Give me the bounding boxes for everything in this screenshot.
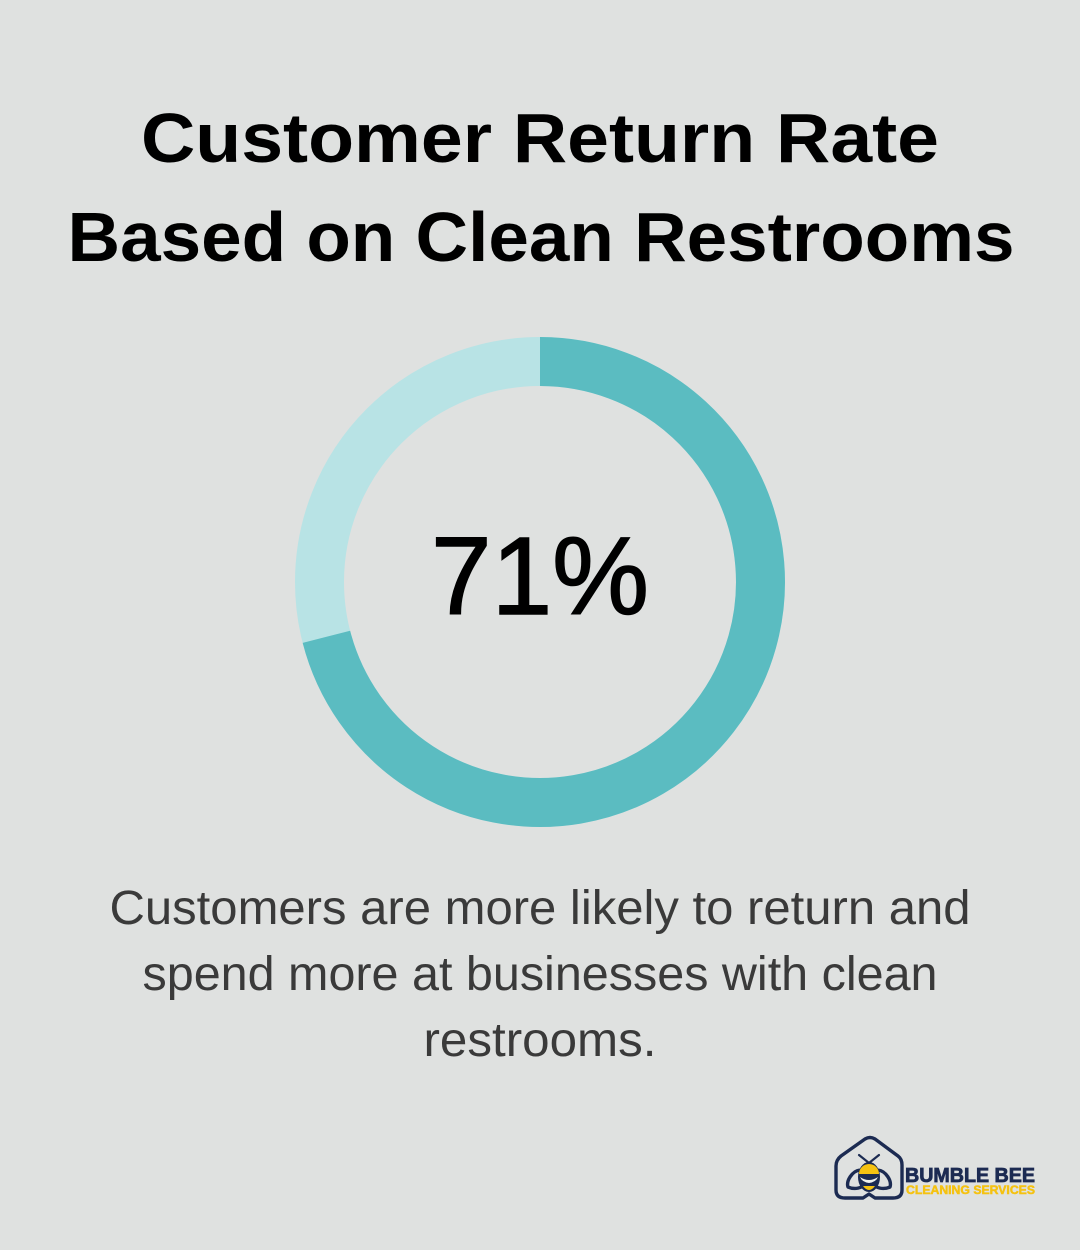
description text: restrooms.: [424, 1014, 656, 1067]
description text: spend more at businesses with clean: [142, 948, 938, 1001]
title: Customer Return Rate: [141, 99, 939, 177]
logo: Bumble Bee Cleaning Services: [836, 1138, 1035, 1198]
description text: [110, 882, 970, 1067]
description text: Customers are more likely to return and: [110, 882, 970, 935]
title: [68, 99, 1015, 276]
tagline: CLEANING SERVICES: [906, 1183, 1035, 1197]
wordmark: BUMBLE BEE: [905, 1164, 1035, 1187]
icon: house with bee: [836, 1138, 902, 1198]
donut chart: 71%: [320, 362, 760, 802]
donut value: 71%: [431, 515, 649, 638]
title: Based on Clean Restrooms: [68, 198, 1015, 276]
